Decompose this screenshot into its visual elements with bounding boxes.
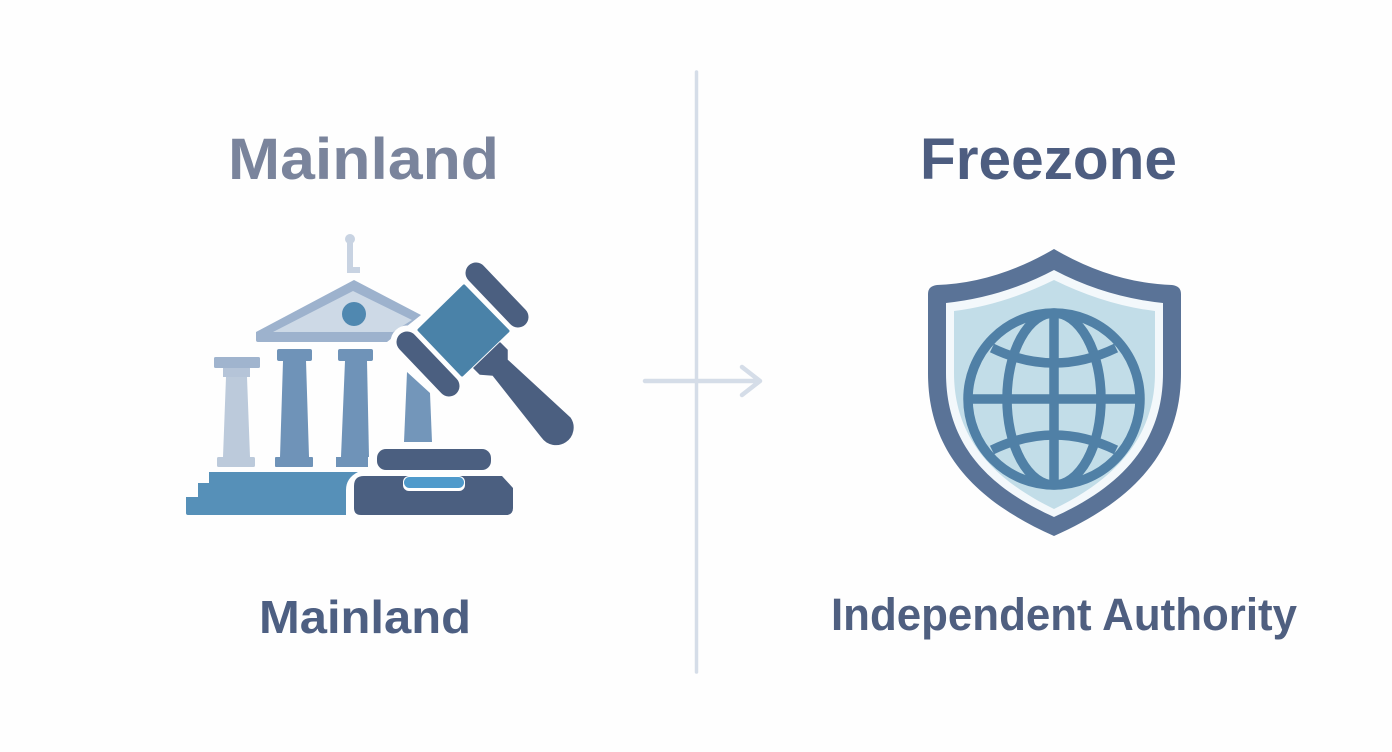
handle [474, 343, 573, 444]
head [419, 286, 508, 375]
icon: courthouse and gavel [186, 234, 573, 515]
globe [968, 313, 1140, 485]
sound block [354, 449, 513, 515]
label: Independent Authority: Independent Authority [831, 589, 1297, 640]
finial [345, 234, 360, 273]
shield inner white [946, 270, 1163, 517]
middle columns [275, 349, 373, 467]
heading: Freezone: Freezone [920, 127, 1177, 192]
left column [214, 357, 260, 467]
right column fragment [404, 372, 432, 442]
heading: Mainland: Mainland [228, 127, 499, 192]
arrow [645, 367, 760, 395]
halo [407, 342, 449, 386]
steps [186, 472, 358, 515]
pediment [256, 280, 421, 342]
label: Mainland: Mainland [259, 591, 471, 643]
shield fill [954, 280, 1155, 509]
head caps [407, 273, 518, 386]
icon: shield with globe [928, 249, 1181, 536]
shield outer [928, 249, 1181, 536]
center divider [695, 72, 698, 672]
gavel [407, 273, 573, 444]
